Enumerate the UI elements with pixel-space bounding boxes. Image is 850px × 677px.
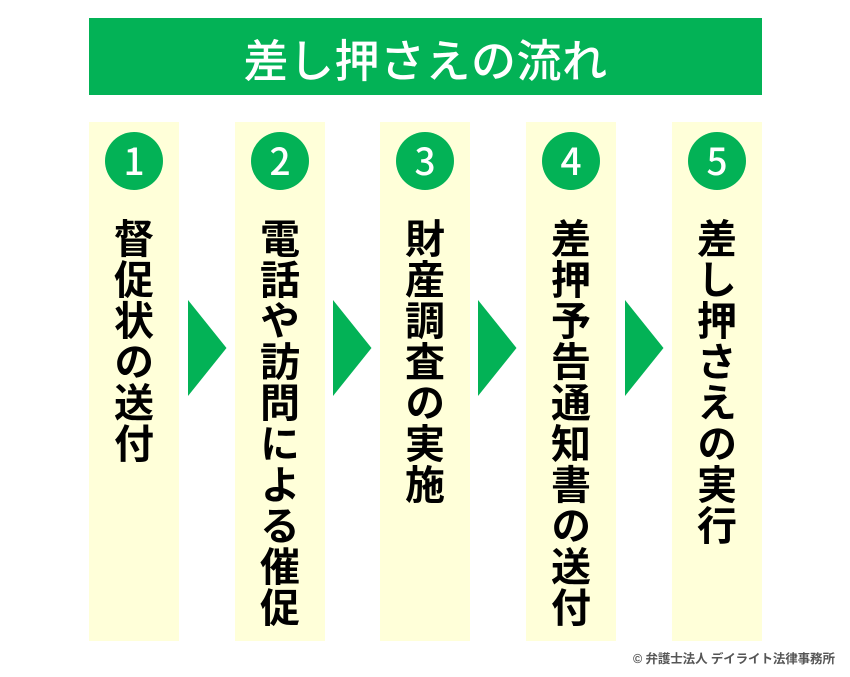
number badge 3	[396, 132, 454, 190]
number badge 3: 3	[414, 132, 436, 186]
number badge 2	[251, 132, 309, 190]
number badge 4	[542, 132, 600, 190]
arrow 3	[478, 300, 516, 396]
step 5 text: 差し押さえの実行	[688, 218, 746, 546]
number badge 5: 5	[706, 132, 728, 186]
panel: step 3	[380, 122, 470, 641]
panel: step 2	[235, 122, 325, 641]
number badge 1	[105, 132, 163, 190]
panel: step 1	[89, 122, 179, 641]
copyright credit: © 弁護士法人 デイライト法律事務所	[633, 652, 835, 666]
step 4 text: 差押予告通知書の送付	[542, 218, 600, 628]
panel: step 4	[526, 122, 616, 641]
panel: step 5	[672, 122, 762, 641]
title banner: 差し押さえの流れ	[243, 25, 608, 90]
arrow 4	[625, 300, 664, 396]
title banner	[89, 18, 762, 95]
arrow 1	[188, 300, 226, 396]
number badge 5	[688, 132, 746, 190]
step 2 text: 電話や訪問による催促	[251, 218, 309, 628]
step 3 text: 財産調査の実施	[396, 218, 454, 505]
number badge 4: 4	[560, 132, 582, 186]
step 1 text: 督促状の送付	[105, 218, 163, 464]
number badge 1: 1	[123, 132, 145, 186]
arrow 2	[333, 300, 372, 396]
number badge 2: 2	[269, 132, 291, 186]
